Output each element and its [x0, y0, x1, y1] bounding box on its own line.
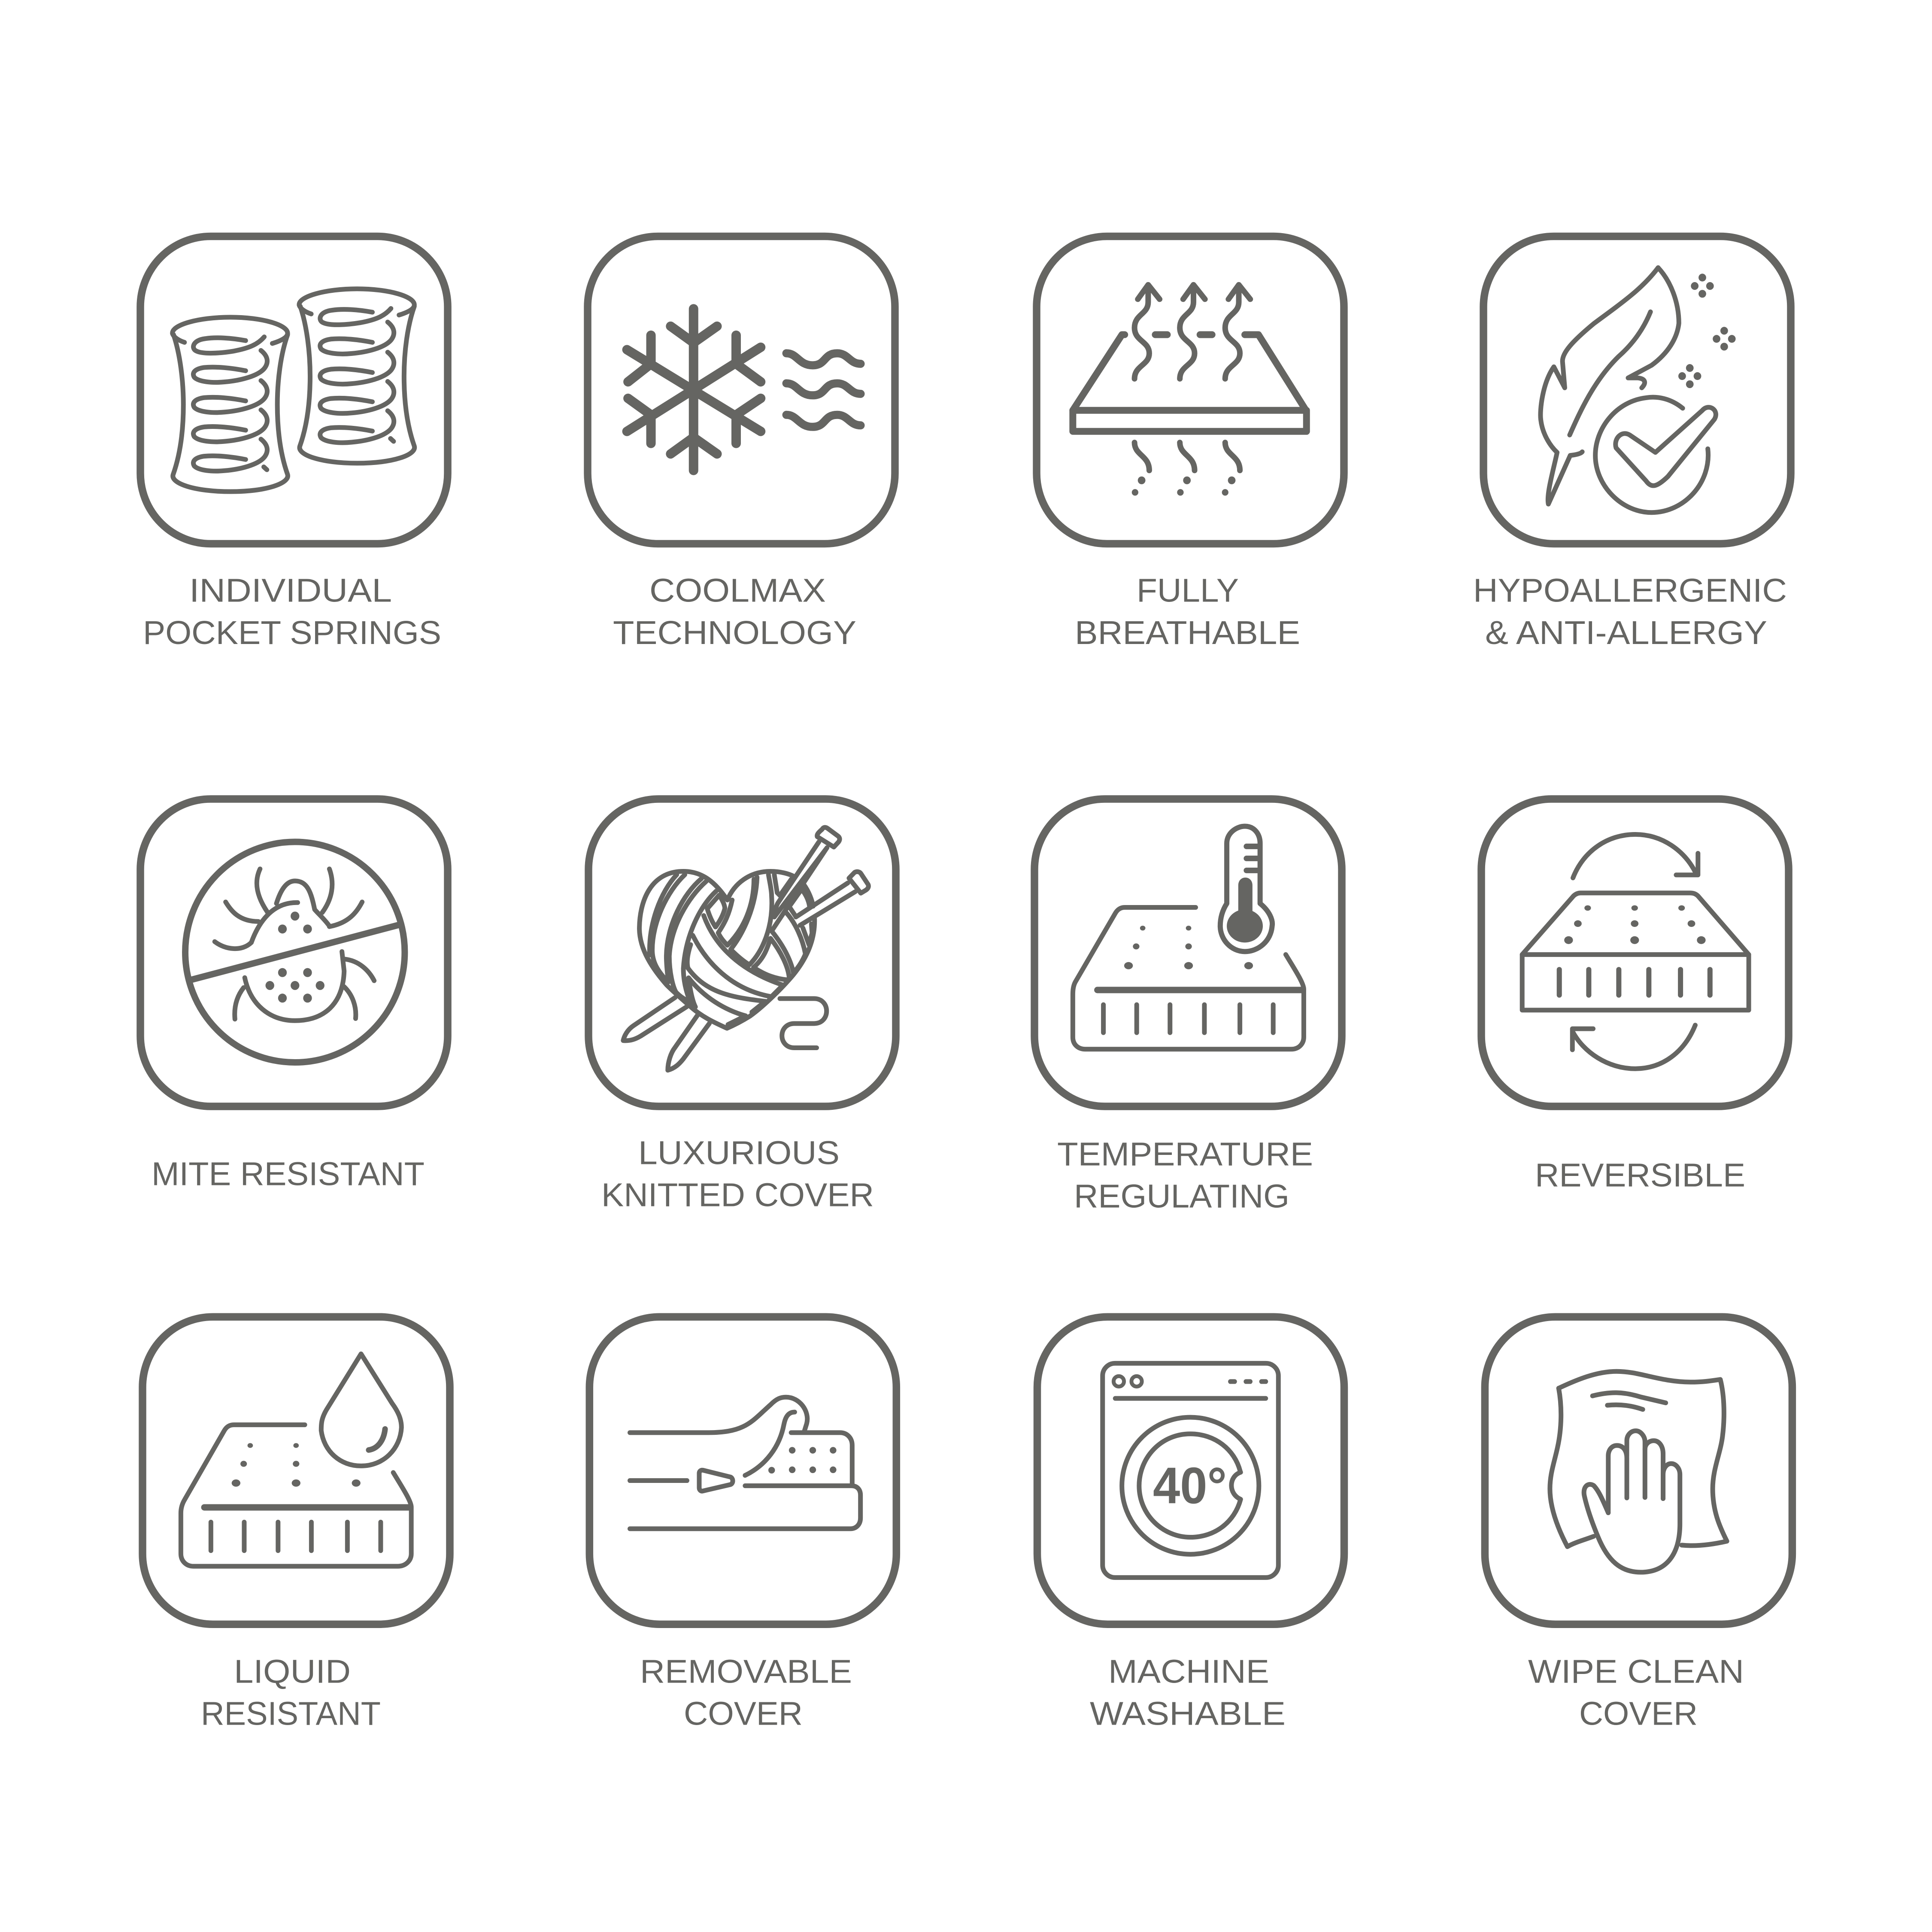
label: POCKET SPRINGS [143, 614, 441, 651]
icon: washing machine [1103, 1363, 1278, 1577]
frame [1481, 799, 1789, 1106]
frame [140, 236, 448, 544]
panel: liquid resistant [143, 1317, 450, 1732]
frame [588, 236, 895, 544]
frame [589, 1317, 896, 1624]
label [601, 1134, 874, 1213]
label: KNITTED COVER [601, 1176, 874, 1213]
label: COVER [684, 1695, 803, 1732]
panel: luxurious knitted cover [588, 799, 896, 1213]
label: LUXURIOUS [638, 1134, 840, 1171]
label: REVERSIBLE [1535, 1157, 1745, 1194]
icon: cover peeled from mattress [630, 1397, 861, 1529]
icon: pocket springs [173, 289, 415, 492]
frame [1034, 799, 1342, 1106]
panel: removable cover [589, 1317, 896, 1732]
label: MACHINE [1108, 1653, 1269, 1690]
label: FULLY [1137, 572, 1239, 609]
label: TEMPERATURE [1057, 1136, 1313, 1173]
label: LIQUID [234, 1653, 351, 1690]
panel: individual pocket springs [140, 236, 448, 651]
label [1473, 572, 1787, 651]
panel: wipe clean cover [1485, 1317, 1792, 1732]
label: HYPOALLERGENIC [1473, 572, 1787, 609]
label [640, 1653, 852, 1732]
label: MITE RESISTANT [152, 1156, 425, 1193]
label [613, 572, 856, 651]
frame [588, 799, 896, 1106]
label: WASHABLE [1090, 1695, 1286, 1732]
label: COVER [1579, 1695, 1698, 1732]
frame [1037, 1317, 1344, 1624]
frame [1037, 236, 1344, 544]
panel: machine washable [1037, 1317, 1344, 1732]
icon: crossed out mite [185, 842, 405, 1063]
frame [1483, 236, 1791, 544]
icon: mattress with water drop [181, 1354, 411, 1566]
icon: heart shaped yarn and needles [623, 827, 868, 1070]
label [201, 1653, 381, 1732]
label [1075, 572, 1300, 651]
wash temperature: 40° [1153, 1457, 1227, 1515]
panel: reversible [1481, 799, 1789, 1194]
icon: mattress with thermometer [1073, 826, 1304, 1049]
frame [1485, 1317, 1792, 1624]
label [1528, 1653, 1744, 1732]
panel: mite resistant [140, 799, 448, 1193]
label [1057, 1136, 1313, 1215]
label [143, 572, 441, 651]
label: INDIVIDUAL [189, 572, 392, 609]
label: REGULATING [1074, 1178, 1289, 1215]
icon: feather with check mark [1541, 267, 1736, 513]
icon: snowflake and waves [627, 309, 861, 471]
label: & ANTI-ALLERGY [1485, 614, 1767, 651]
label: REMOVABLE [640, 1653, 852, 1690]
panel: hypoallergenic and anti-allergy [1473, 236, 1791, 651]
icon: breathable mattress layer [1073, 285, 1307, 496]
frame [143, 1317, 450, 1624]
frame [140, 799, 448, 1106]
label: RESISTANT [201, 1695, 381, 1732]
label: BREATHABLE [1075, 614, 1300, 651]
panel: coolmax technology [588, 236, 895, 651]
panel: fully breathable [1037, 236, 1344, 651]
label: WIPE CLEAN [1528, 1653, 1744, 1690]
icon: hand wiping with cloth [1550, 1371, 1727, 1572]
icon: flipping mattress [1522, 834, 1749, 1069]
label: COOLMAX [649, 572, 826, 609]
panel: temperature regulating [1034, 799, 1342, 1215]
label [1090, 1653, 1286, 1732]
label: TECHNOLOGY [613, 614, 856, 651]
